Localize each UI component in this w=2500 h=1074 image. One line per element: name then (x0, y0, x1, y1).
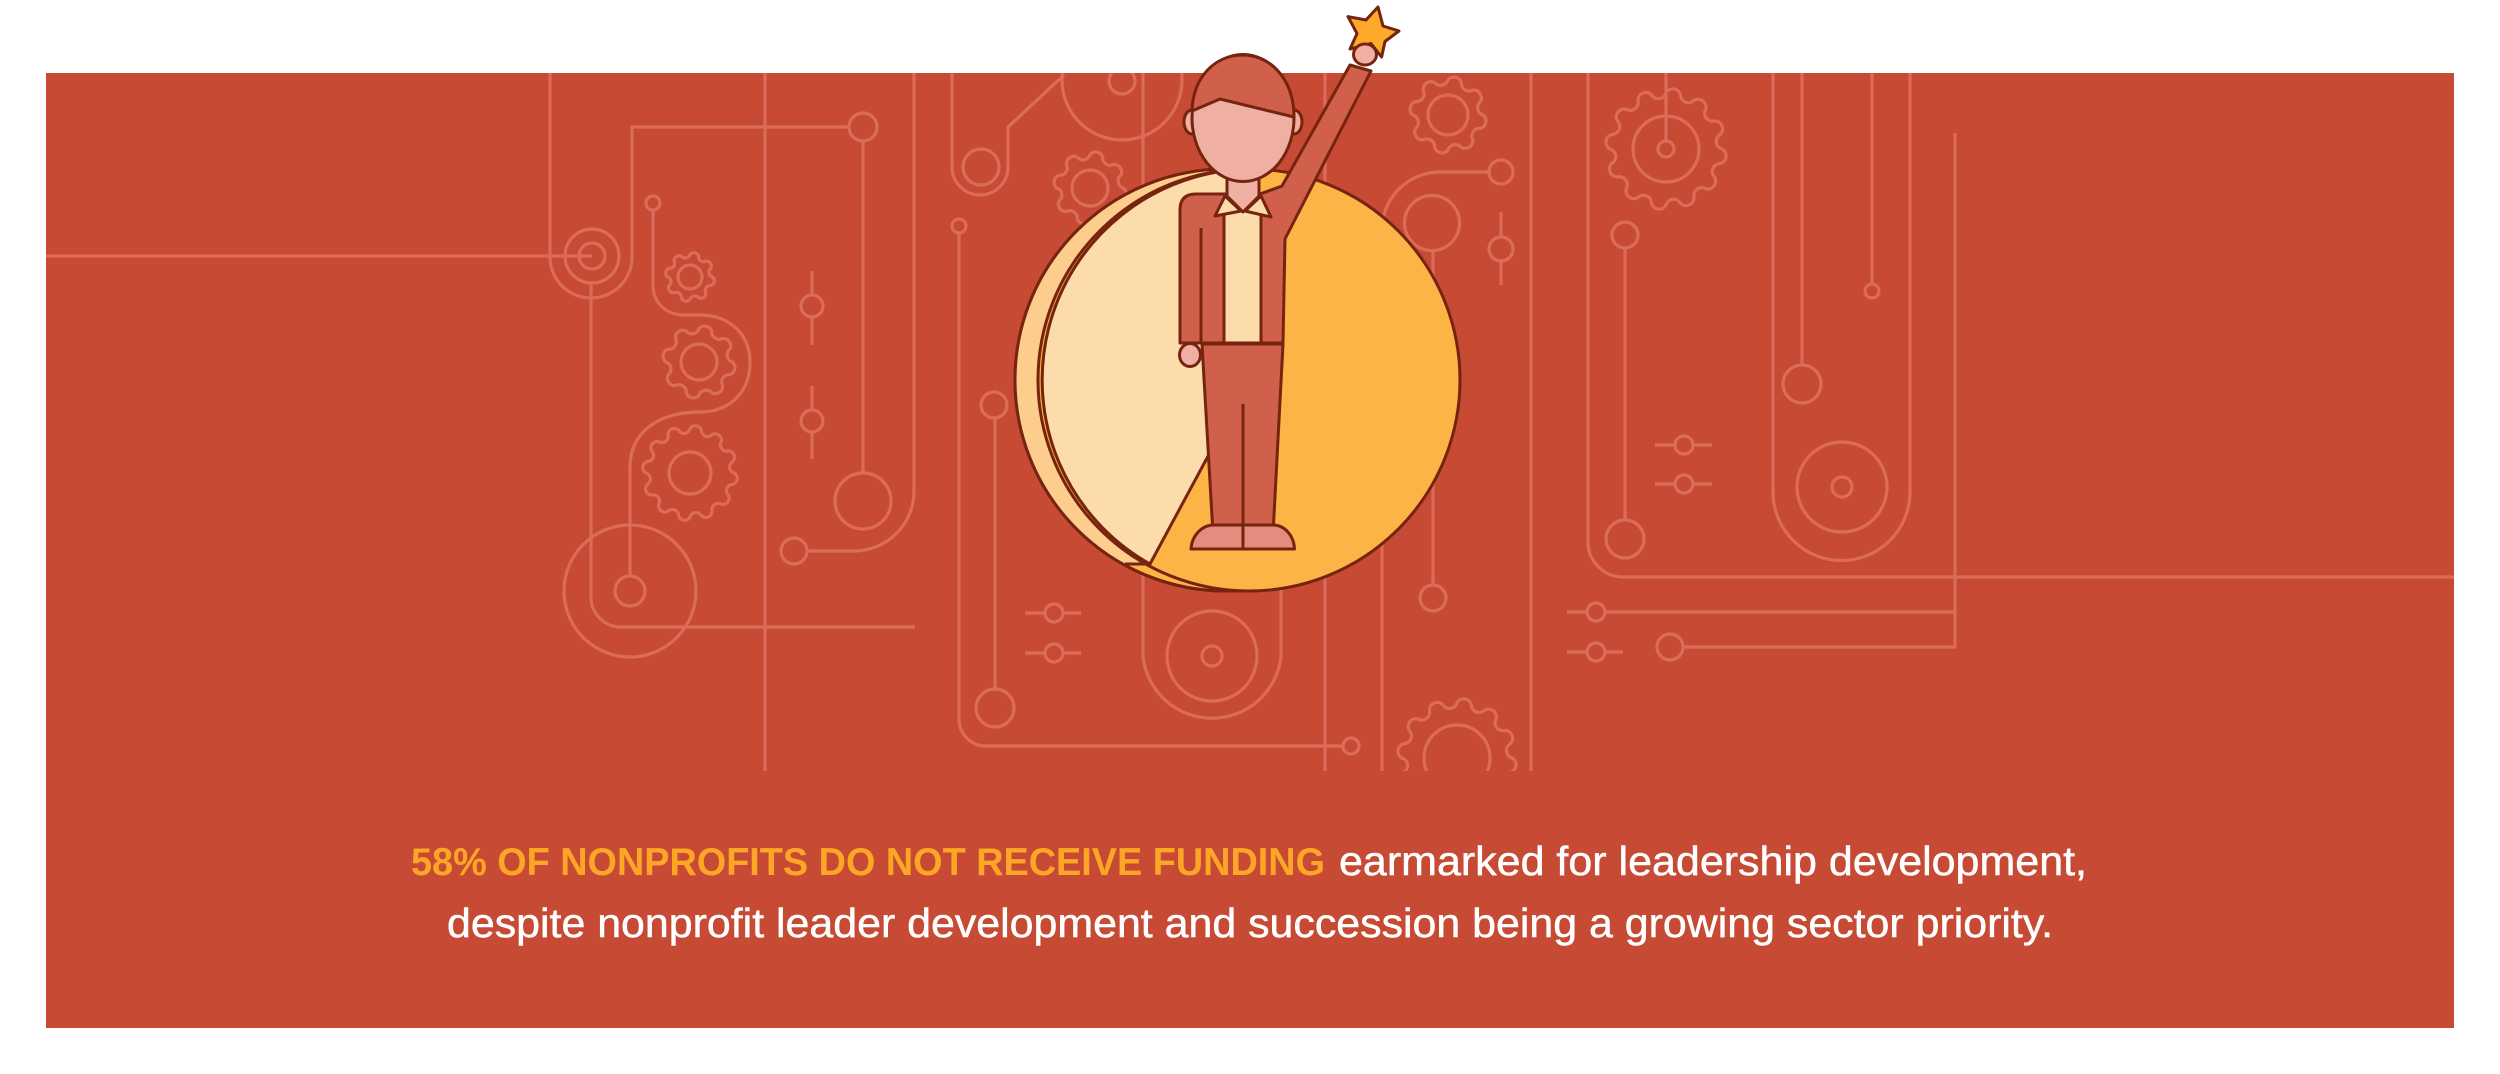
hair (1192, 55, 1294, 117)
lower hand (1180, 344, 1200, 366)
coin back disc (1014, 168, 1239, 592)
pie front disc (1038, 169, 1460, 591)
headline line one (411, 838, 2087, 884)
pie slice: 42 percent (1042, 169, 1249, 564)
neck (1227, 176, 1259, 212)
shoes (1191, 525, 1294, 549)
collar (1215, 196, 1271, 217)
headline line one: earmarked for leadership development, (1339, 838, 2087, 884)
statistic text (411, 838, 2087, 946)
raised hand (1354, 44, 1376, 65)
jacket sleeve line (1200, 228, 1202, 343)
shirt (1224, 205, 1261, 343)
shoe divider (1242, 525, 1244, 549)
trouser crease (1242, 404, 1244, 525)
star (1348, 7, 1399, 57)
circuit line pattern (46, 73, 2454, 771)
headline line two: despite nonprofit leader development and succession being a growing sector priority. (447, 900, 2053, 946)
head (1192, 54, 1294, 182)
headline line one: 58% OF NONPROFITS DO NOT RECEIVE FUNDING (411, 841, 1325, 884)
pie chart coin (1015, 169, 1460, 591)
ears (1184, 110, 1302, 134)
trousers (1202, 344, 1283, 525)
figure reaching for a star (1180, 7, 1399, 549)
jacket and raised arm (1180, 65, 1371, 343)
